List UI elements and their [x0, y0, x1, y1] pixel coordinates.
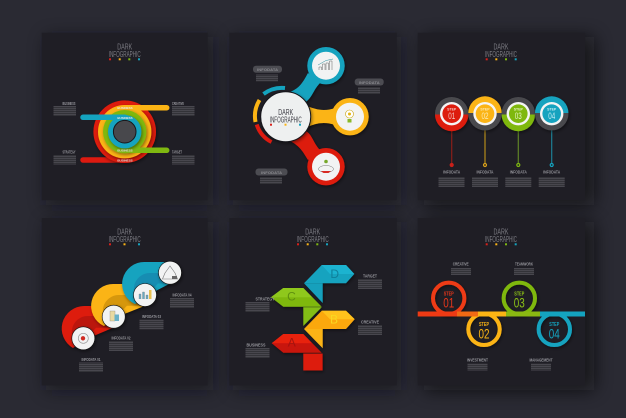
- node: chart icon: [134, 284, 156, 306]
- step 02: [468, 96, 502, 130]
- step 02 text: STEP: [479, 322, 489, 328]
- heading: arrows: [297, 226, 329, 244]
- step 03 text: [514, 292, 525, 310]
- label: business: [54, 101, 76, 116]
- branch: teal: [290, 47, 345, 103]
- arcs around hub: [255, 88, 285, 142]
- panel: steps with pins: [418, 33, 594, 205]
- step 04 text: [549, 322, 560, 341]
- hub dots: [270, 124, 301, 126]
- title dots: [109, 58, 140, 60]
- node: people icon: [158, 261, 182, 284]
- ribbon red: [62, 306, 113, 348]
- panel: folded arrows: [229, 218, 401, 390]
- step 01: [435, 97, 468, 131]
- label: teamwork: [514, 262, 534, 275]
- hub title: [270, 107, 302, 124]
- label: management: [530, 358, 553, 370]
- pin labels: INFODATA: [543, 170, 561, 174]
- label: infodata 02: INFODATA 02: [112, 336, 131, 340]
- letter c: C: [287, 290, 296, 304]
- node: document icon: [102, 305, 125, 328]
- label: creative: CREATIVE: [172, 101, 184, 106]
- pin labels: [438, 170, 565, 187]
- heading: timeline: [485, 226, 517, 244]
- tag: infodata right: [355, 78, 384, 94]
- icon: chart: [318, 59, 333, 70]
- letter d: D: [330, 267, 339, 281]
- loop 01: [433, 283, 464, 314]
- tag: infodata right: INFODATA: [359, 80, 380, 85]
- step 03: 03: [515, 111, 522, 121]
- label: strategy: [54, 150, 76, 164]
- label: infodata 03: INFODATA 03: [142, 314, 161, 319]
- heading: timeline: INFOGRAPHIC: [485, 234, 517, 244]
- ribbon orange: [91, 284, 145, 326]
- label: investment: [467, 358, 488, 370]
- label: business: BUSINESS: [246, 342, 266, 348]
- title dots: [486, 243, 517, 245]
- hub circle: [261, 92, 311, 142]
- heading: pins: DARK: [494, 42, 509, 52]
- label: creative: [451, 262, 471, 275]
- step 03 text: 03: [514, 294, 525, 310]
- tag: infodata top: [253, 66, 282, 82]
- step 01 text: 01: [443, 294, 454, 310]
- panel: timeline loops: [418, 218, 594, 390]
- heading: rings: DARK: [117, 42, 132, 52]
- label: teamwork: TEAMWORK: [515, 262, 533, 266]
- pin lines: [450, 125, 553, 166]
- heading: rings: INFOGRAPHIC: [109, 49, 141, 59]
- loop 02: [468, 314, 500, 345]
- heading: pins: INFOGRAPHIC: [485, 49, 517, 59]
- ring labels: BUSINESS: [117, 148, 133, 152]
- ring labels: [117, 106, 133, 162]
- icon: bulb: [346, 110, 354, 122]
- label: infodata 02: [109, 336, 133, 351]
- pin labels: INFODATA: [510, 170, 527, 174]
- label: target: TARGET: [363, 274, 377, 278]
- label: strategy: STRATEGY: [62, 150, 76, 154]
- chart: concentric rings: [83, 100, 167, 163]
- label: target: [172, 150, 194, 164]
- arrow d: [304, 265, 354, 303]
- ring labels: BUSINESS: [117, 106, 133, 110]
- label: infodata 01: [79, 357, 103, 372]
- label: target: [358, 274, 382, 289]
- heading: timeline: DARK: [494, 226, 509, 236]
- label: business: [246, 342, 270, 358]
- title dots: [486, 58, 517, 60]
- step 01: 01: [448, 111, 455, 121]
- node: target icon: [72, 327, 95, 350]
- ring labels: BUSINESS: [117, 158, 133, 162]
- label: infodata 01: INFODATA 01: [82, 357, 101, 362]
- step 03: [502, 97, 535, 131]
- step 02 text: 02: [478, 325, 490, 341]
- label: infodata 03: [140, 314, 164, 330]
- step 03 text: STEP: [514, 292, 525, 298]
- heading: arrows: INFOGRAPHIC: [297, 234, 329, 244]
- step 01 text: [443, 292, 454, 310]
- loop 04: [539, 314, 570, 345]
- arrow b: [304, 311, 355, 348]
- title dots: [297, 243, 328, 245]
- step 04: STEP: [547, 108, 557, 112]
- panel: concentric rings: [42, 33, 213, 205]
- branch: red: [290, 130, 345, 185]
- step 02: 02: [482, 111, 488, 121]
- title dots: [109, 243, 140, 245]
- branch: orange: [305, 98, 369, 135]
- tag: infodata bottom: [256, 168, 288, 184]
- pin labels: INFODATA: [443, 170, 461, 174]
- heading: arrows: DARK: [305, 226, 320, 236]
- label: business: BUSINESS: [62, 101, 76, 106]
- tag: infodata top: INFODATA: [257, 67, 278, 72]
- label: infodata 04: [170, 292, 194, 308]
- heading: rings: [109, 42, 141, 59]
- heading: ribbon: [109, 226, 141, 244]
- step 04 text: STEP: [549, 322, 560, 328]
- step 04: [535, 96, 568, 130]
- step 01: STEP: [447, 108, 457, 112]
- heading: ribbon: INFOGRAPHIC: [109, 234, 141, 244]
- label: strategy: [246, 296, 274, 312]
- letter b: B: [330, 312, 338, 326]
- step 02: STEP: [480, 108, 490, 112]
- label: creative: [172, 101, 194, 116]
- step 02 text: [478, 322, 490, 341]
- arrow c: [271, 288, 322, 326]
- tag: infodata bottom: INFODATA: [261, 170, 282, 175]
- icon: piggy gear: [318, 160, 334, 173]
- ribbon teal: [122, 262, 170, 304]
- letter a: A: [288, 336, 296, 350]
- pin labels: INFODATA: [476, 170, 494, 174]
- label: creative: [358, 320, 382, 335]
- label: management: MANAGEMENT: [530, 358, 553, 362]
- label: investment: INVESTMENT: [467, 358, 488, 362]
- loop 03: [504, 283, 535, 314]
- step 01 text: STEP: [444, 292, 454, 298]
- label: strategy: STRATEGY: [256, 296, 274, 302]
- label: target: TARGET: [172, 150, 182, 154]
- step 04: 04: [548, 111, 555, 121]
- timeline bar: [418, 312, 585, 316]
- label: creative: CREATIVE: [453, 262, 469, 266]
- ring labels: BUSINESS: [117, 116, 133, 120]
- arrow a: [272, 334, 323, 370]
- panel: metaball hub: [229, 33, 401, 205]
- heading: ribbon: DARK: [117, 226, 132, 236]
- hub title: DARK: [278, 107, 293, 117]
- step 03: STEP: [514, 108, 524, 112]
- panel: ribbon staircase: [42, 218, 213, 390]
- hub title: INFOGRAPHIC: [270, 114, 302, 124]
- label: creative: CREATIVE: [361, 320, 379, 324]
- heading: pins: [485, 42, 517, 59]
- step 04 text: 04: [549, 325, 560, 341]
- label: infodata 04: INFODATA 04: [172, 292, 192, 298]
